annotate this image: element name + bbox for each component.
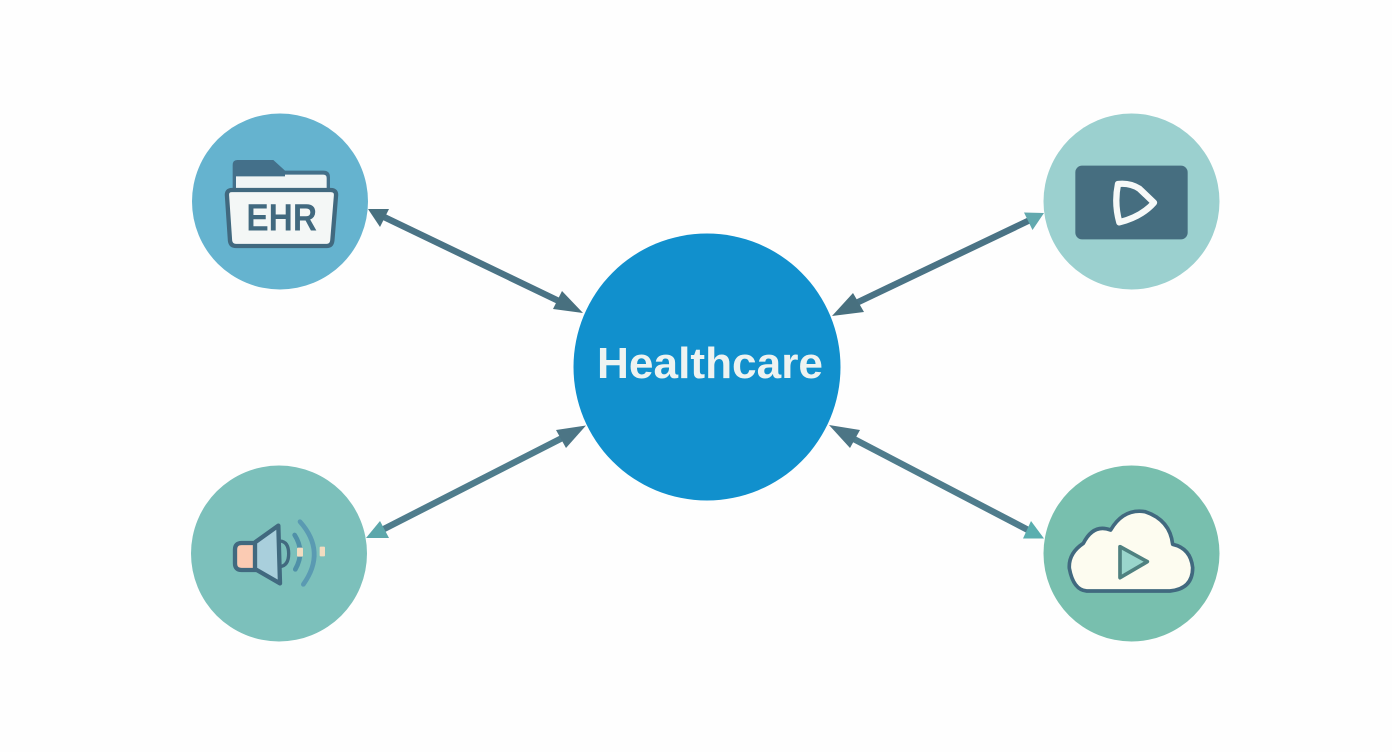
arrow: video to healthcare: [832, 212, 1044, 316]
icon: EHR folder: [227, 160, 336, 246]
central healthcare node: [574, 234, 840, 500]
heading: Healthcare: Healthcare: [597, 339, 823, 388]
node: cloud video: [1044, 466, 1220, 642]
node: EHR folder: [192, 114, 368, 290]
arrow: EHR to healthcare: [368, 209, 583, 313]
arrow: cloud to healthcare: [829, 425, 1044, 538]
node: audio speaker: [191, 466, 367, 642]
label: EHR: EHR: [246, 198, 317, 240]
icon: video play: [1075, 166, 1188, 239]
icon: speaker: [235, 522, 325, 584]
arrow: speaker to healthcare: [366, 426, 586, 538]
icon: cloud with play button: [1069, 511, 1193, 591]
node: video player: [1044, 114, 1220, 290]
